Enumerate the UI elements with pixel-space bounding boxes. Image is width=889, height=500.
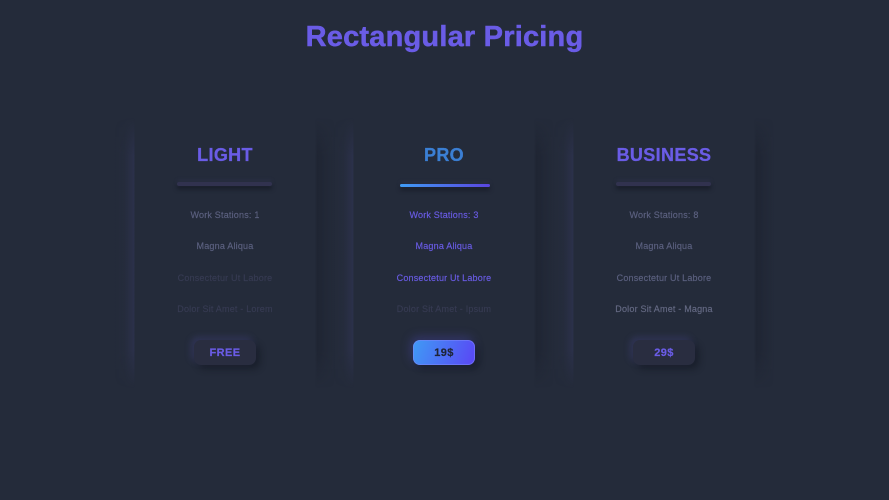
divider bar: pro: [400, 184, 490, 187]
feature: dolor sit amet: Dolor Sit Amet - Ipsum: [397, 304, 491, 314]
price button: free: [194, 340, 256, 365]
feature: work stations: Work Stations: 3: [409, 210, 479, 220]
plan name: light: LIGHT: [197, 145, 253, 165]
divider bar: business: [616, 182, 711, 186]
feature: magna aliqua: Magna Aliqua: [416, 241, 472, 251]
feature: consectetur: Consectetur Ut Labore: [617, 273, 711, 283]
feature: work stations: Work Stations: 8: [629, 210, 699, 220]
feature: consectetur: Consectetur Ut Labore: [397, 273, 491, 283]
price button: 19$: [413, 340, 475, 365]
feature: work stations: Work Stations: 1: [190, 210, 260, 220]
feature: magna aliqua: Magna Aliqua: [197, 241, 253, 251]
price button: 29$: 29$: [654, 347, 674, 359]
feature: magna aliqua: Magna Aliqua: [636, 241, 692, 251]
panel: pro plan: [347, 138, 491, 368]
feature: consectetur: Consectetur Ut Labore: [178, 273, 272, 283]
price button: free: FREE: [210, 347, 240, 359]
title: Rectangular Pricing: [306, 21, 583, 53]
feature: dolor sit amet: Dolor Sit Amet - Magna: [615, 304, 713, 314]
price button: 19$: 19$: [434, 347, 454, 359]
divider bar: light: [177, 182, 272, 186]
feature: dolor sit amet: Dolor Sit Amet - Lorem: [177, 304, 273, 314]
plan name: business: BUSINESS: [617, 145, 711, 165]
panel: light plan: [128, 138, 273, 369]
price button: 29$: [633, 340, 695, 365]
panel: business plan: [567, 138, 713, 369]
plan name: pro: PRO: [424, 145, 464, 165]
